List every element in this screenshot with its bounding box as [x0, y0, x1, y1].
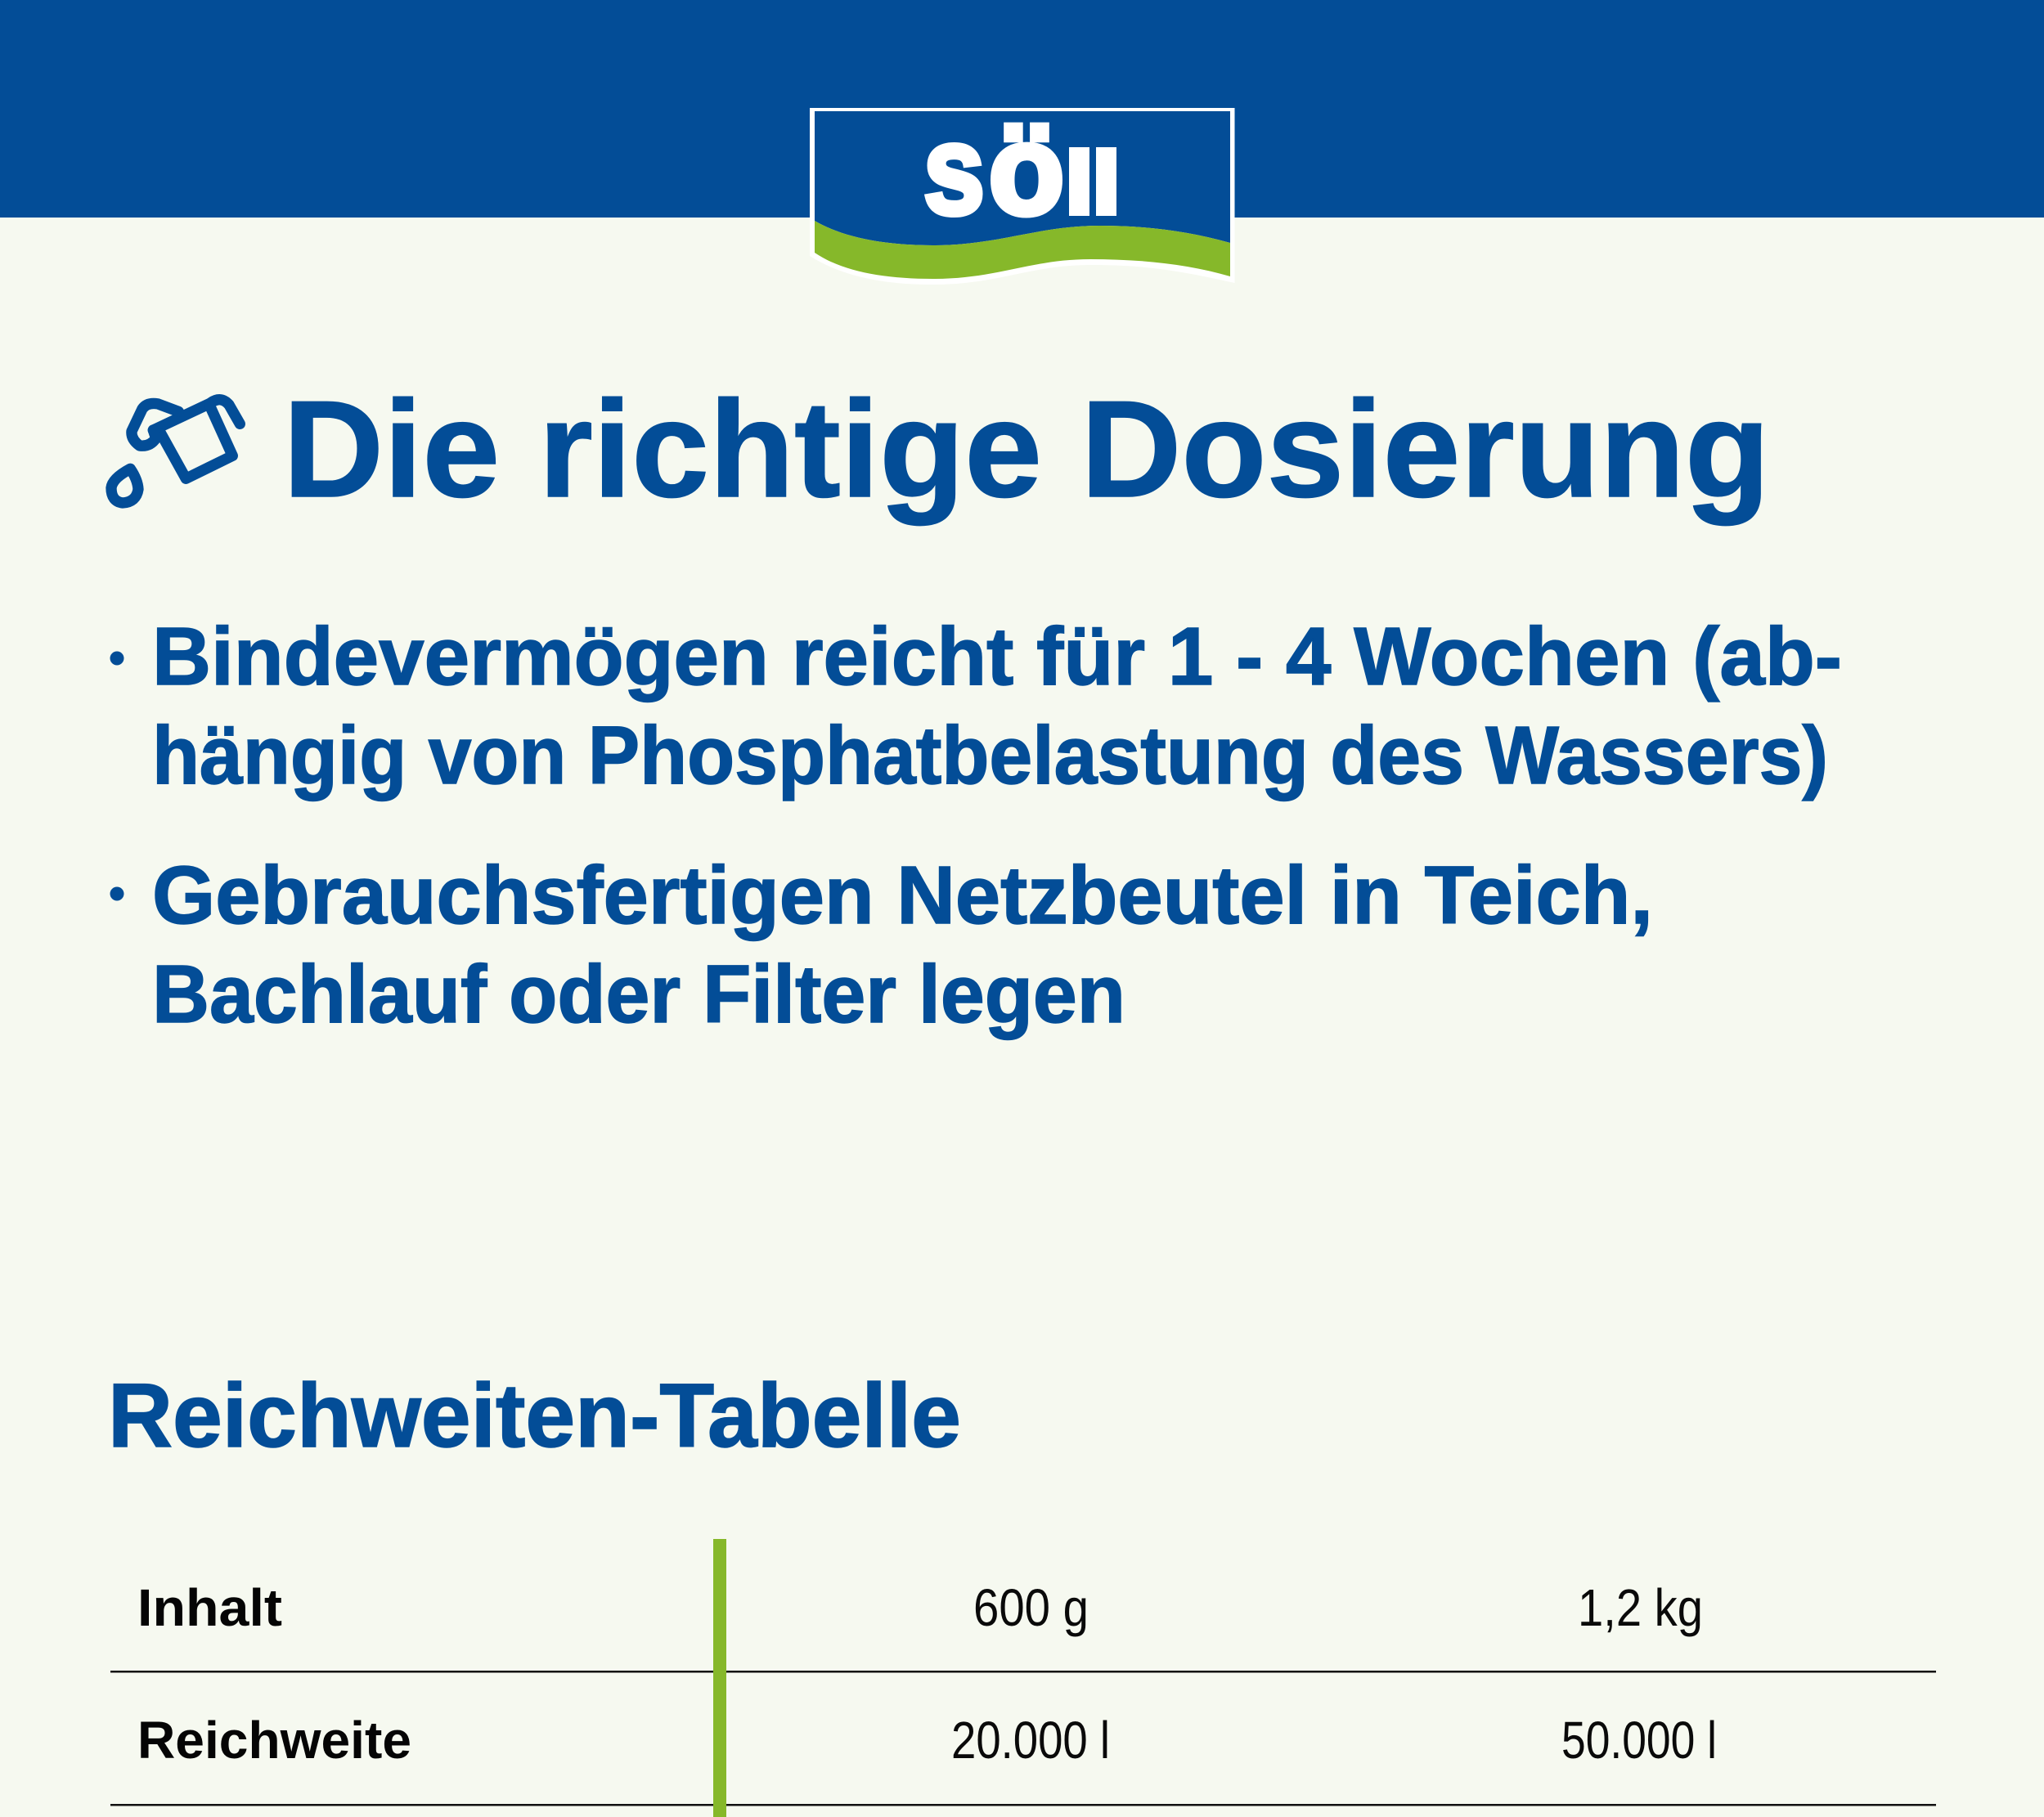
bullet list: hängig von Phosphatbelastung des Wassers): [152, 710, 1828, 801]
table: Reichweite: [137, 1711, 411, 1770]
bullet list: Bindevermögen reicht für 1 - 4 Wochen (ab-: [152, 611, 1842, 702]
bullet list: Gebrauchsfertigen Netzbeutel in Teich,: [152, 850, 1653, 941]
logo: Söll: s: [923, 99, 985, 240]
table: 1,2 kg: [1578, 1578, 1703, 1637]
icon: pouring cup with drop: [111, 400, 240, 503]
table: 600 g: [973, 1578, 1089, 1637]
table heading: Reichweiten-Tabelle: [108, 1366, 961, 1466]
table: [110, 1539, 1936, 1817]
table: 20.000 l: [951, 1711, 1110, 1770]
bullet list: Bachlauf oder Filter legen: [152, 949, 1125, 1040]
logo: Söll: [810, 99, 1235, 285]
header band: [0, 0, 2044, 218]
logo: Söll: ö: [989, 99, 1064, 240]
table: Inhalt: [137, 1578, 282, 1637]
logo: Söll: l: [1085, 131, 1127, 236]
bullet list: [110, 611, 1842, 1040]
title: Die richtige Dosierung: [283, 372, 1770, 526]
table: 50.000 l: [1561, 1711, 1717, 1770]
logo: Söll: l: [1058, 131, 1100, 236]
